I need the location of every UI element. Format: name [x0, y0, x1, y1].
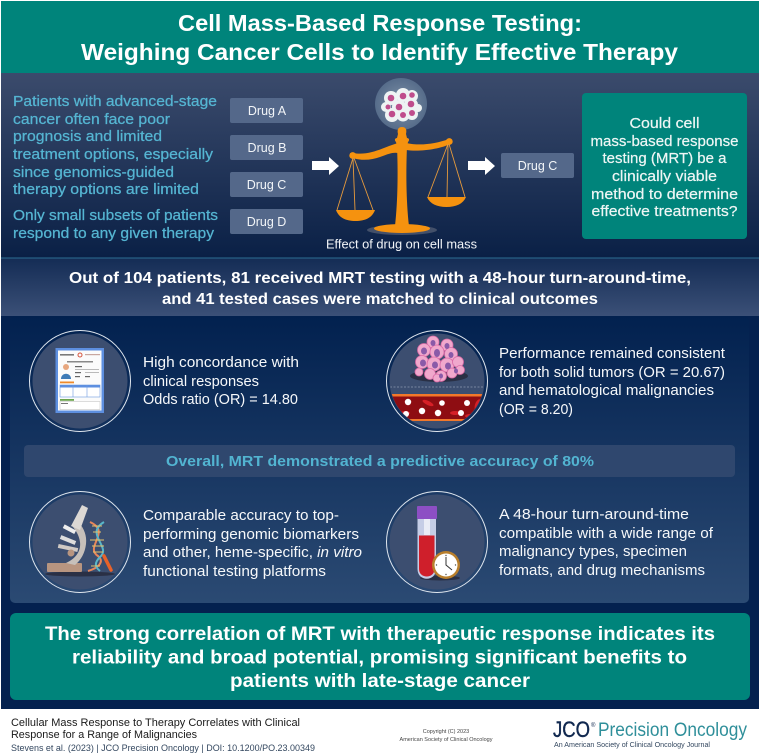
text: turnaround finding: compatible with a wide range of	[499, 526, 714, 542]
text block: patient background: Patients with advanced-stage	[13, 94, 217, 110]
panel: background and drug selection	[1, 73, 759, 258]
panel: header	[1, 1, 759, 73]
text: comparable accuracy finding: performing genomic biomarkers	[143, 527, 359, 543]
selected drug box: Drug C	[518, 159, 557, 173]
text: concordance finding	[143, 355, 299, 408]
footer: journal logo: Precision Oncology	[598, 720, 747, 741]
icon: tumor and blood vessel	[386, 330, 488, 432]
text block: patient background: treatment options, especially	[13, 147, 214, 163]
footer: citation: Stevens et al. (2023) | JCO Precision Oncology | DOI: 10.1200/PO.23.00349	[11, 743, 315, 754]
arrow: to selected drug	[468, 157, 495, 175]
text: tumor types finding: and hematological malignancies	[499, 383, 714, 399]
footer: copyright: Copyright (C) 2023	[423, 729, 469, 735]
text: comparable accuracy finding	[143, 508, 362, 580]
text: turnaround finding: malignancy types, specimen	[499, 544, 687, 560]
text: tumor types finding: Performance remained consistent	[499, 346, 725, 362]
icon: blood tube and clock	[386, 492, 488, 592]
text: tumor types finding	[499, 346, 725, 418]
drug boxes	[230, 98, 303, 234]
drug boxes: Drug A	[248, 104, 287, 118]
label: scale caption: Effect of drug on cell mass	[326, 238, 477, 252]
text: comparable accuracy finding: functional testing platforms	[143, 564, 326, 580]
panel: findings	[10, 316, 749, 603]
footer: journal logo: ®	[591, 722, 596, 729]
footer: journal logo	[553, 717, 747, 749]
text: concordance finding: clinical responses	[143, 374, 259, 390]
text block: patient background	[13, 94, 218, 242]
panel: conclusion	[10, 613, 750, 700]
text: turnaround finding: A 48-hour turn-around-time	[499, 507, 689, 523]
panel: conclusion: reliability and broad potential, promising significant benefits to	[72, 646, 687, 668]
footer: citation: Response for a Range of Malignancies	[11, 729, 197, 741]
callout: overall accuracy: Overall, MRT demonstrated a predictive accuracy of 80%	[166, 453, 595, 470]
callout: study question: clinically viable	[612, 169, 717, 185]
footer: citation: Cellular Mass Response to Therapy Correlates with Clinical	[11, 717, 300, 729]
title: Weighing Cancer Cells to Identify Effective Therapy	[81, 39, 678, 65]
callout: overall accuracy	[24, 445, 735, 477]
text block: patient background: respond to any given therapy	[13, 226, 215, 242]
panel: cohort summary band	[1, 258, 759, 316]
arrow: into scale	[312, 157, 339, 175]
text: tumor types finding: for both solid tumors (OR = 20.67)	[499, 365, 725, 381]
drug boxes: Drug D	[247, 215, 286, 229]
callout: study question: Could cell	[630, 116, 700, 132]
text: comparable accuracy finding: and other, heme-specific, in vitro	[143, 545, 362, 561]
text block: patient background: cancer often face poor	[13, 112, 170, 128]
text block: patient background: Only small subsets of patients	[13, 208, 218, 224]
callout: study question: method to determine	[591, 187, 738, 203]
text: concordance finding: High concordance with	[143, 355, 299, 371]
icon: patient record	[30, 330, 130, 432]
panel: cohort summary band: Out of 104 patients, 81 received MRT testing with a 48-hour turn-around-time,	[69, 270, 691, 287]
footer: citation	[11, 717, 315, 754]
panel: conclusion: patients with late-stage cancer	[230, 670, 530, 692]
footer: copyright	[400, 729, 493, 743]
footer: copyright: American Society of Clinical Oncology	[400, 737, 493, 743]
callout: study question	[582, 93, 747, 239]
footer: journal logo: An American Society of Clinical Oncology Journal	[554, 742, 710, 749]
text: tumor types finding: (OR = 8.20)	[499, 402, 573, 418]
text: comparable accuracy finding: Comparable accuracy to top-	[143, 508, 339, 524]
callout: study question: testing (MRT) be a	[602, 151, 727, 167]
panel: conclusion: The strong correlation of MRT with therapeutic response indicates its	[45, 623, 715, 645]
selected drug box	[501, 153, 574, 178]
text: concordance finding: Odds ratio (OR) = 14.80	[143, 392, 298, 408]
panel: cohort summary band: and 41 tested cases were matched to clinical outcomes	[162, 291, 598, 308]
title: Cell Mass-Based Response Testing:	[178, 10, 582, 36]
drug boxes: Drug B	[248, 141, 286, 155]
callout: study question: mass-based response	[590, 134, 739, 150]
callout: study question: effective treatments?	[592, 204, 738, 220]
title	[81, 10, 678, 65]
footer: journal logo: JCO	[553, 717, 590, 742]
text: turnaround finding: formats, and drug mechanisms	[499, 563, 705, 579]
text: turnaround finding	[499, 507, 714, 579]
icon: microscope and DNA	[30, 492, 130, 592]
text block: patient background: since genomics-guided	[13, 165, 174, 181]
text block: patient background: prognosis and limited	[13, 129, 162, 145]
drug boxes: Drug C	[247, 178, 286, 192]
text block: patient background: therapy options are limited	[13, 182, 199, 198]
icon: balance scale with cells	[336, 78, 466, 235]
